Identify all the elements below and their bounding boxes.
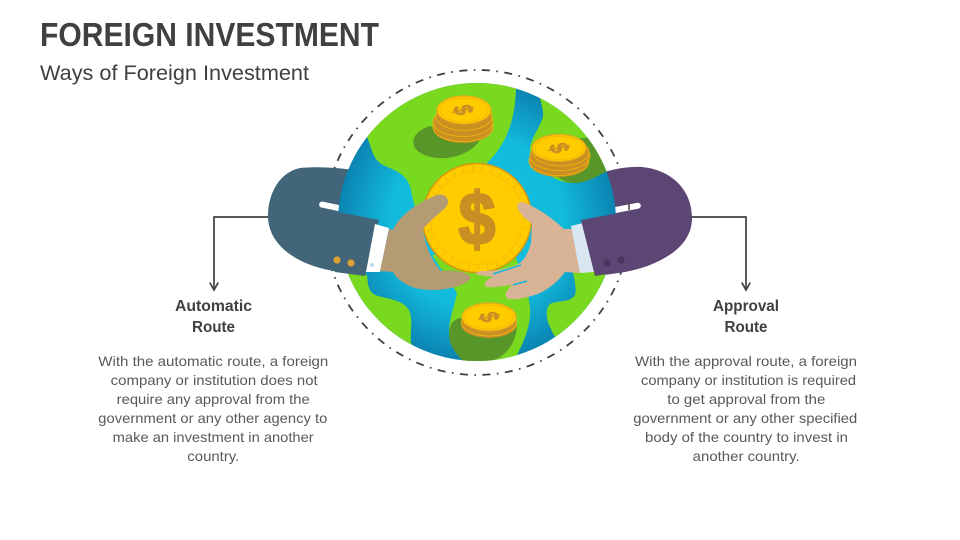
coin stack: upper right xyxy=(529,134,590,177)
left cuff xyxy=(366,224,389,272)
body text: country. xyxy=(187,448,239,464)
subtitle: Ways of Foreign Investment xyxy=(40,62,309,85)
body text: government or any other specified xyxy=(633,410,857,426)
coin stack: bottom: $ xyxy=(472,309,506,325)
main coin xyxy=(422,164,532,272)
shadow: bottom coins xyxy=(449,318,517,361)
right hand xyxy=(476,202,580,299)
right sleeve lower xyxy=(581,208,660,276)
coin stack: top xyxy=(433,96,493,143)
heading xyxy=(175,298,252,336)
right column: approval route xyxy=(633,298,857,464)
dashed ring around globe xyxy=(324,70,630,375)
right arm front xyxy=(476,202,660,299)
land: top xyxy=(367,83,516,206)
right cuff xyxy=(571,223,594,273)
shadow: top coins xyxy=(413,126,482,158)
body text: make an investment in another xyxy=(113,429,314,445)
left sleeve back xyxy=(268,167,379,276)
body text: another country. xyxy=(693,448,800,464)
dollar sign: $ xyxy=(459,177,495,260)
left column: automatic route xyxy=(98,298,328,464)
left arm front xyxy=(313,194,470,290)
heading xyxy=(713,298,779,336)
heading: Automatic xyxy=(175,298,252,315)
right sleeve back xyxy=(581,167,692,276)
ocean xyxy=(338,83,616,361)
finger lines xyxy=(493,265,527,285)
body text xyxy=(633,353,857,464)
body text xyxy=(98,353,328,464)
heading: Route xyxy=(724,319,768,336)
globe xyxy=(338,83,616,361)
heading: Route xyxy=(192,319,235,336)
land: lower right xyxy=(546,266,606,337)
connector: right arrow xyxy=(690,217,750,290)
coin stack: bottom xyxy=(461,303,517,338)
body text: body of the country to invest in xyxy=(645,429,848,445)
land: lower middle xyxy=(432,255,530,361)
body text: require any approval from the xyxy=(117,391,310,407)
coin stack: upper right: $ xyxy=(542,140,576,156)
land: upper right xyxy=(530,98,606,183)
body text: to get approval from the xyxy=(667,391,826,407)
body text: company or institution does not xyxy=(111,372,318,388)
connector: left arrow xyxy=(210,217,270,290)
left sleeve lower xyxy=(313,207,379,276)
body text: company or institution is required xyxy=(641,372,856,388)
left sleeve buttons xyxy=(333,256,355,267)
left hand xyxy=(380,194,470,290)
body text: With the automatic route, a foreign xyxy=(98,353,328,369)
title: FOREIGN INVESTMENT xyxy=(40,16,379,53)
body text: government or any other agency to xyxy=(98,410,328,426)
coin stack: top: $ xyxy=(446,102,480,118)
land: lower left xyxy=(348,274,413,346)
heading: Approval xyxy=(713,298,779,315)
left cuff button xyxy=(370,263,374,267)
right sleeve buttons xyxy=(603,256,625,267)
body text: With the approval route, a foreign xyxy=(635,353,857,369)
shadow: upper right coins xyxy=(553,138,607,183)
